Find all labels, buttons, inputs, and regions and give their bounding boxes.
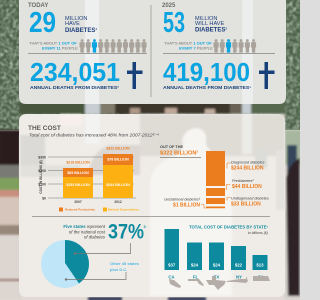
icon row: 11 people	[80, 39, 147, 53]
big number: 29 million: 29	[29, 7, 56, 39]
gap band	[19, 102, 85, 114]
text: five states: Five states represent	[63, 224, 105, 229]
heading: 2025: 2025	[162, 3, 176, 9]
bar: 2012: $78 BILLION	[107, 158, 129, 162]
label: diagnosed: $244 BILLION	[231, 166, 264, 172]
label: gestational: Gestational diabetes²	[164, 198, 201, 202]
text: million have diabetes: 1	[95, 27, 97, 31]
pie section	[41, 220, 146, 288]
bar: 2007	[63, 160, 93, 198]
text: million will have diabetes: WILL HAVE	[195, 21, 224, 27]
subtitle: Total cost of diabetes has increased 48% from 2007-2012²⁻⁴	[29, 132, 159, 138]
stacked bar	[206, 151, 225, 208]
state labels: PA	[258, 274, 264, 280]
big number: 37%: 37%	[108, 220, 144, 244]
big number: annual deaths today: 234,051	[30, 57, 120, 87]
heading: out of the $322 billion: $322 BILLION	[160, 150, 196, 156]
text: 1 out of every 11 people: 1 OUT OF	[58, 40, 77, 46]
text: 1 out of every 7 people: EVERY 7	[179, 46, 196, 50]
panel: today and 2025 backdrop	[19, 0, 286, 104]
bar: 2012: $244 BILLION	[106, 183, 130, 187]
text: five states: of the national cost	[69, 229, 106, 234]
text: 1 out of every 7 people: PEOPLE	[196, 46, 213, 50]
label: diagnosed: Diagnosed diabetes	[231, 160, 265, 164]
bar values	[168, 262, 264, 268]
bar values: $37	[168, 262, 176, 268]
bar: 2007: $218 BILLION	[66, 160, 90, 164]
big number: annual deaths 2025: 419,100	[163, 57, 250, 87]
caption: annual deaths from diabetes: ANNUAL DEATHS FROM DIABETES³	[163, 85, 252, 90]
state labels: NY	[236, 274, 242, 280]
icon: cross	[259, 62, 274, 89]
panel: the cost	[19, 114, 285, 297]
label: undiagnosed: Undiagnosed diabetes	[231, 196, 269, 200]
label: other states: Other 45 states	[110, 261, 140, 266]
state labels	[168, 274, 264, 280]
legend: Medical Expenditures	[108, 208, 139, 212]
heading: today: TODAY	[28, 3, 48, 9]
bar values: $13	[256, 262, 264, 268]
label: prediabetes: Prediabetes²	[232, 179, 254, 183]
bar chart: cost by year: 2012	[114, 200, 122, 204]
bar: 2012: $322 BILLION	[106, 146, 130, 150]
bar values: $24	[213, 262, 221, 268]
heading: the cost: THE COST	[28, 125, 61, 132]
legend	[59, 208, 139, 212]
text: million have diabetes: DIABETES	[65, 28, 95, 34]
bar chart: cost by year: $200	[38, 169, 46, 173]
bar chart: cost by year	[38, 146, 139, 212]
label: gestational: $1 BILLION	[173, 202, 200, 208]
bottom shoes	[88, 297, 122, 300]
icon row: 7 people	[214, 39, 256, 53]
state labels: TX	[214, 274, 219, 280]
bar chart: cost by year: $300	[38, 156, 46, 160]
bar chart: cost by year: COST IN BILLIONS ($)	[39, 160, 43, 194]
text: 1 out of every 11 people: EVERY 11	[42, 46, 61, 50]
text: million have diabetes: HAVE	[65, 21, 80, 27]
bar chart: cost by year: $0	[42, 196, 46, 200]
bar chart: cost by year: 2007	[74, 200, 82, 204]
bar: 2012	[103, 146, 133, 198]
label: prediabetes: $44 BILLION	[232, 184, 262, 190]
legend: Reduced Productivity	[65, 208, 95, 212]
heading: out of the $322 billion: 3	[196, 150, 198, 154]
state silhouettes	[169, 276, 270, 290]
text: 1 out of every 11 people: THAT'S ABOUT	[29, 40, 58, 46]
state labels: FL	[193, 274, 198, 280]
caption: annual deaths from diabetes: ANNUAL DEATHS FROM DIABETES²	[30, 85, 120, 90]
text: million will have diabetes: MILLION	[195, 16, 217, 22]
state labels: CA	[168, 274, 175, 280]
heading: out of the $322 billion: OUT OF THE	[160, 145, 183, 149]
bar chart: cost by year: $100	[38, 182, 46, 186]
bar values: $24	[191, 262, 199, 268]
bar: 2007: $153 BILLION	[66, 183, 90, 187]
big number: 53 million: 53	[163, 7, 185, 39]
heading: total cost by state: TOTAL COST OF DIABETES BY STATE³	[189, 224, 269, 230]
text: million will have diabetes: DIABETES	[195, 28, 225, 34]
state bar chart: in billions ($)	[248, 231, 268, 235]
foliage	[0, 0, 300, 130]
bar values: $22	[235, 262, 243, 268]
bars	[164, 229, 268, 270]
bar: 2007: $69 BILLION	[67, 171, 89, 175]
label: undiagnosed: $33 BILLION	[231, 202, 261, 208]
text: 1 out of every 7 people: THAT'S ABOUT	[164, 40, 193, 46]
state bar chart	[164, 224, 270, 290]
connectors	[226, 163, 231, 200]
pie section: 3	[144, 224, 146, 229]
text: million have diabetes: MILLION	[65, 16, 87, 22]
pie chart	[41, 240, 89, 288]
text: 1 out of every 7 people: 1 OUT OF	[193, 40, 212, 46]
icon: cross	[127, 62, 142, 89]
label: other states: plus D.C.	[110, 267, 127, 272]
text: 1 out of every 11 people: PEOPLE	[61, 46, 78, 50]
stacked breakdown	[160, 145, 269, 208]
text: five states: of diabetes	[84, 234, 106, 240]
panel: today	[28, 3, 147, 90]
panel: 2025	[162, 3, 275, 90]
leader lines	[66, 243, 130, 280]
text: million will have diabetes: 2	[225, 26, 227, 30]
